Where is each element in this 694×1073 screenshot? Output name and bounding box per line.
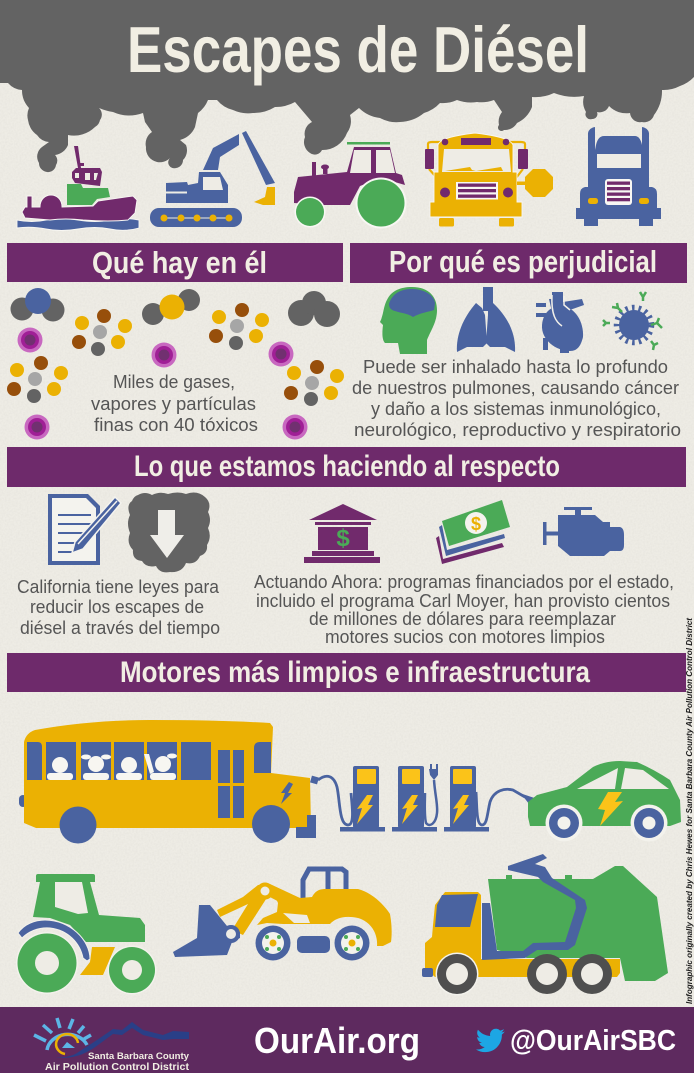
icon: bank with dollar sign <box>304 504 380 563</box>
icon: engine <box>543 507 624 556</box>
icon: charging station one <box>340 766 385 832</box>
text: California laws: California tiene leyes para <box>17 576 220 597</box>
icon: tractor <box>294 142 406 228</box>
icon: blue and grey molecule <box>10 288 64 322</box>
twitter handle: @OurAirSBC <box>510 1025 676 1057</box>
title: Escapes de Diésel <box>127 13 589 86</box>
vehicles row <box>17 127 661 230</box>
credit line: Infographic originally created by Chris Hewes for Santa Barbara County Air Pollution Control District <box>684 617 694 1004</box>
text: why it is harmful: Puede ser inhalado hasta lo profundo <box>363 356 668 377</box>
text: contents of diesel exhaust: vapores y partículas <box>91 393 256 414</box>
text: California laws: reducir los escapes de <box>30 596 204 617</box>
logo: Santa Barbara County APCD <box>34 1018 190 1073</box>
text: why it is harmful: de nuestros pulmones, causando cáncer <box>352 377 679 398</box>
icon: head and brain <box>380 287 437 354</box>
text: why it is harmful: neurológico, reproductivo y respiratorio <box>354 419 681 440</box>
footer band <box>0 1007 694 1073</box>
icon: excavator <box>150 131 275 227</box>
logo: Santa Barbara County APCD: Air Pollution Control District <box>45 1061 190 1073</box>
text: acting now: incluido el programa Carl Moyer, han provisto cientos <box>256 590 670 611</box>
icon: particle five <box>282 414 308 440</box>
heading band: Lo que estamos haciendo al respecto: Lo que estamos haciendo al respecto <box>134 450 560 483</box>
icon: electric car <box>528 761 681 842</box>
text: acting now: Actuando Ahora: programas financiados por el estado, <box>254 571 674 592</box>
website: OurAir.org <box>254 1020 420 1061</box>
logo: Santa Barbara County APCD: Santa Barbara County <box>88 1051 190 1062</box>
icon: virus and antibodies <box>603 292 662 350</box>
icon: atom cluster two <box>209 303 269 350</box>
icon: green tractor <box>16 874 156 994</box>
heading band: Lo que estamos haciendo al respecto <box>7 447 686 487</box>
icon: particle one <box>18 328 42 352</box>
icon: atom cluster four <box>284 360 344 406</box>
text: California laws: diésel a través del tiempo <box>20 617 220 638</box>
icon: charging cable to car <box>476 789 535 825</box>
panel: health icons <box>380 287 662 354</box>
smoke cloud banner <box>0 0 694 172</box>
icon: semi truck front <box>576 127 661 226</box>
text: contents of diesel exhaust: finas con 40 tóxicos <box>94 414 258 435</box>
icon: atom cluster one <box>72 309 132 356</box>
text: why it is harmful: y daño a los sistemas inmunológico, <box>371 398 661 419</box>
icon: heart <box>536 292 584 353</box>
icon: twitter bird <box>476 1029 505 1052</box>
icon: atom cluster three <box>7 356 68 403</box>
text: contents of diesel exhaust: Miles de gases, <box>113 371 235 392</box>
icon: cloud with down arrow <box>128 492 210 572</box>
panel: molecules illustration <box>7 288 344 440</box>
icon: tugboat <box>17 146 139 230</box>
icon: particle four <box>24 414 50 440</box>
icon: regulation document and pencil <box>48 494 121 565</box>
icon: garbage truck <box>422 854 668 996</box>
passengers <box>47 754 177 780</box>
icon: charging station two <box>392 764 438 832</box>
icon: dark grey molecule <box>288 291 340 327</box>
icon: electric school bus <box>19 720 316 844</box>
text: acting now: motores sucios con motores limpios <box>325 626 605 647</box>
icon: stack of money: $ <box>471 514 481 534</box>
icon: school bus front <box>425 133 553 226</box>
icon: particle three <box>268 342 294 366</box>
icon: charging cable from bus <box>311 776 352 825</box>
heading band: Qué hay en él <box>7 243 343 282</box>
icon: bank with dollar sign: $ <box>336 525 350 552</box>
icon: particle two <box>152 342 176 368</box>
icon: stack of money <box>436 500 510 564</box>
heading band: Motores más limpios e infraestructura: Motores más limpios e infraestructura <box>120 656 590 689</box>
icon: charging station three <box>444 766 489 832</box>
heading band: Qué hay en él: Qué hay en él <box>92 245 267 280</box>
heading band: Motores más limpios e infraestructura <box>7 653 686 692</box>
icon: yellow and grey molecule <box>142 289 200 325</box>
icon: wheel loader <box>173 869 392 960</box>
text: acting now: de millones de dólares para reemplazar <box>309 608 616 629</box>
icon: lungs <box>457 287 515 352</box>
